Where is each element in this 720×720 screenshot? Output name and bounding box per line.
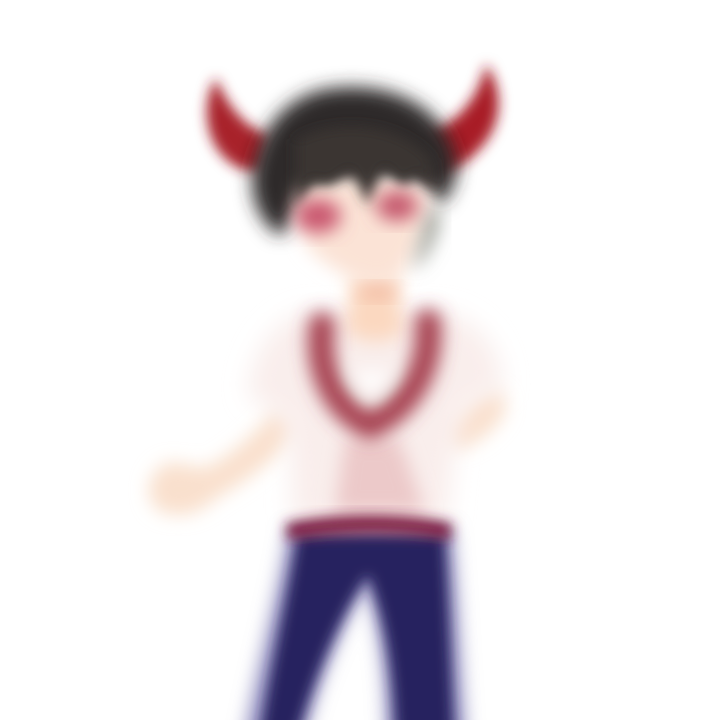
icon: right horn: [420, 64, 499, 174]
side hair strand: [412, 205, 440, 270]
shirt pattern: [335, 440, 425, 512]
icon: left eye: [295, 199, 341, 233]
pants: [244, 528, 466, 720]
left arm and hand: [149, 405, 298, 515]
pants core: [260, 532, 454, 720]
hair: [252, 87, 457, 236]
neck: [346, 275, 404, 341]
waistband: [286, 515, 452, 540]
collar: [321, 322, 428, 426]
right arm and hand: [438, 390, 505, 450]
nose and chin shadow: [358, 285, 398, 299]
face: [297, 179, 429, 284]
fringe: [296, 127, 436, 210]
shirt: [248, 312, 502, 522]
icon: right eye: [376, 191, 418, 221]
icon: left horn: [207, 78, 270, 171]
